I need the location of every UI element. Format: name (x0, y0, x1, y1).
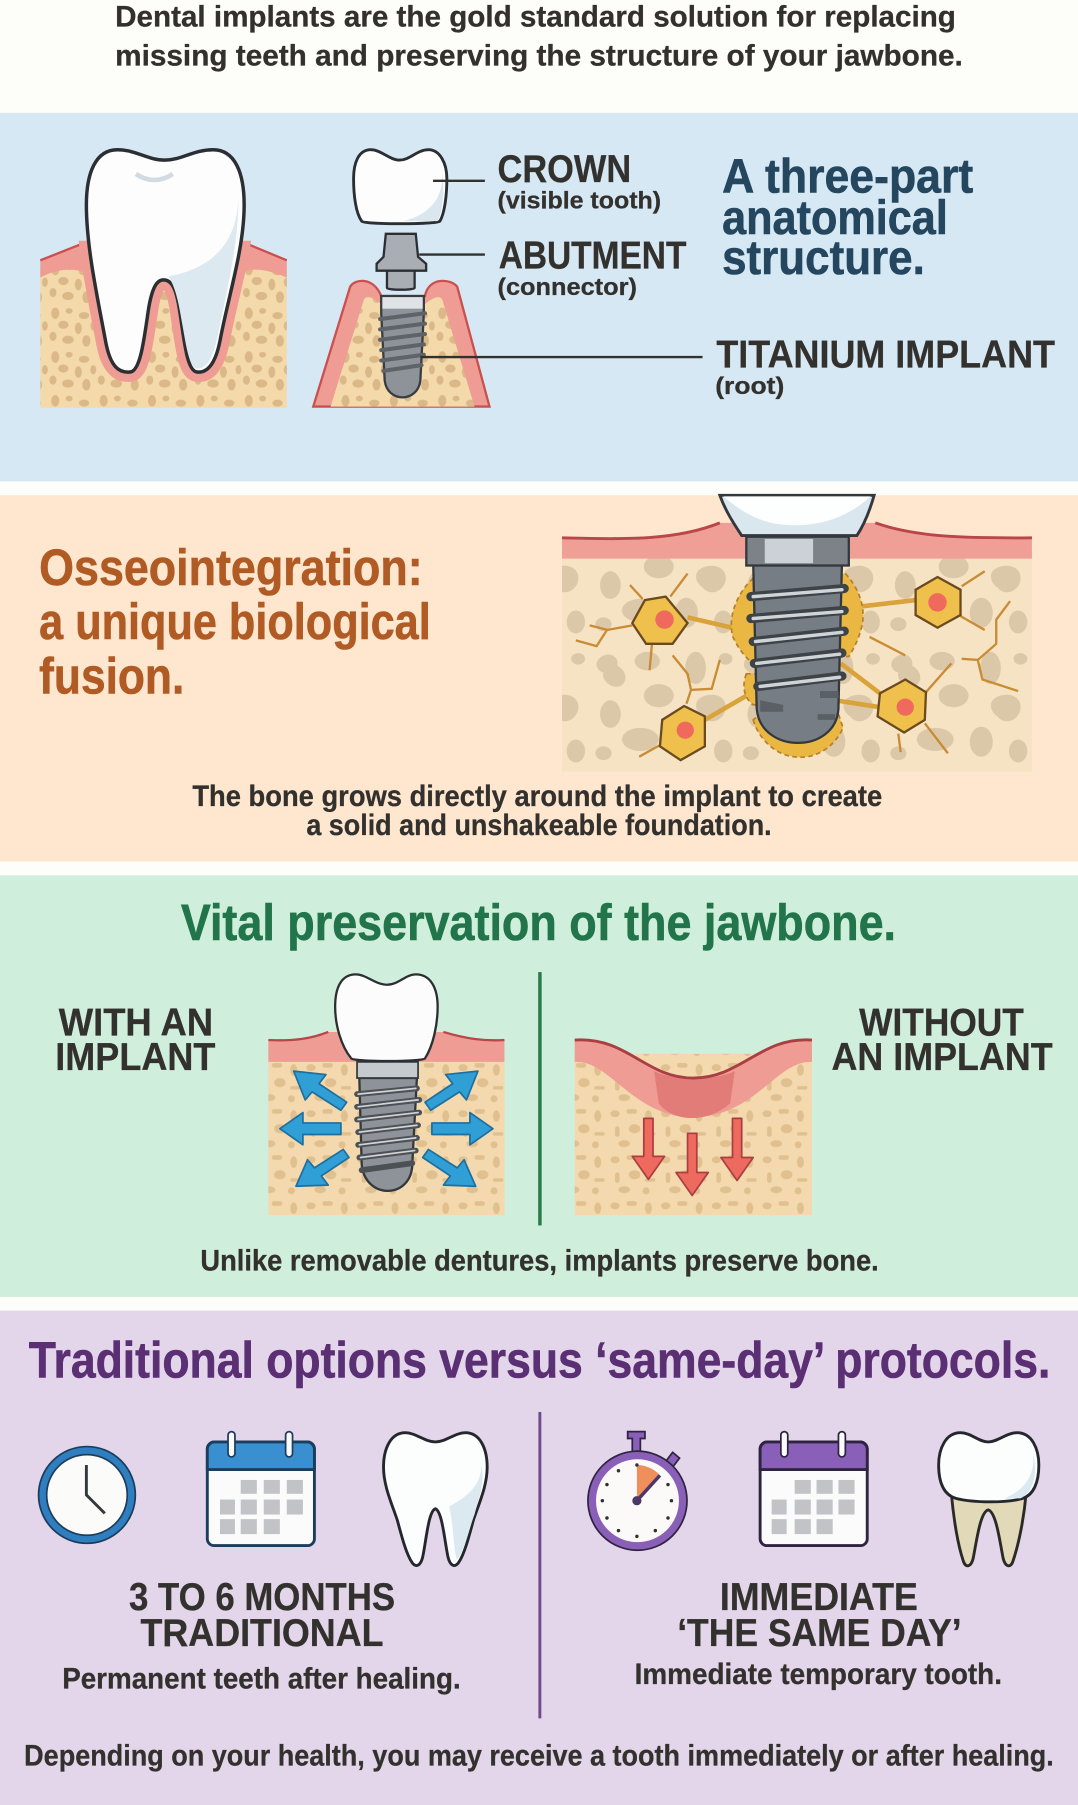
heading: vital preservation: Vital preservation of the jawbone. (181, 894, 896, 951)
abutment (377, 234, 426, 290)
text: traditional timeline (62, 1576, 461, 1695)
illustration: bone fusion around implant (562, 495, 1032, 772)
heading: osseointegration: fusion. (39, 647, 184, 704)
titanium implant (380, 296, 425, 397)
text: bone grows around implant: The bone grows directly around the implant to create (192, 780, 882, 813)
label: crown: (visible tooth) (498, 187, 661, 214)
illustration: bone with implant (268, 974, 504, 1215)
heading: three-part structure: structure. (722, 231, 925, 285)
label: without an implant: WITHOUT (859, 1001, 1024, 1044)
heading: osseointegration: Osseointegration: (39, 539, 423, 596)
label: without an implant: AN IMPLANT (832, 1036, 1053, 1079)
bone cells (632, 577, 961, 760)
label: titanium implant (715, 333, 1055, 400)
leader lines (419, 181, 703, 357)
implant threads (751, 589, 844, 686)
illustration: natural tooth in gum (40, 150, 287, 408)
text: traditional timeline: TRADITIONAL (141, 1612, 384, 1655)
heading: osseointegration (39, 539, 431, 704)
crown (354, 150, 447, 224)
text: bone grows around implant: a solid and unshakeable foundation. (306, 809, 772, 842)
panel: treatment protocols (0, 1311, 1078, 1805)
label: abutment: (connector) (498, 274, 637, 301)
icon: calendar blue (207, 1432, 314, 1546)
panel: anatomy (0, 113, 1078, 481)
intro heading: Dental implants are the gold standard solution for replacing (115, 1, 956, 34)
icon: natural tooth (384, 1433, 487, 1566)
label: crown: CROWN (498, 148, 631, 191)
bone cell branches (576, 571, 1018, 757)
intro heading (115, 1, 963, 73)
text: immediate timeline: IMMEDIATE (720, 1576, 918, 1619)
label: abutment: ABUTMENT (499, 234, 686, 277)
illustration: bone without implant (575, 1040, 812, 1215)
icon: temporary crown tooth (939, 1433, 1039, 1566)
heading: three-part structure: A three-part (722, 149, 973, 203)
crown (335, 974, 438, 1061)
panel: jawbone preservation (0, 875, 1078, 1297)
label: crown (498, 148, 661, 214)
red loss arrows (632, 1118, 753, 1195)
panel: osseointegration (0, 495, 1078, 861)
heading: three-part structure (722, 149, 973, 285)
blue growth arrows (280, 1071, 493, 1186)
cell connectors (688, 600, 916, 720)
heading: three-part structure: anatomical (722, 191, 948, 245)
heading: osseointegration: a unique biological (39, 593, 431, 650)
divider (538, 972, 542, 1225)
text: immediate timeline: Immediate temporary tooth. (635, 1658, 1002, 1691)
implant body (359, 1078, 417, 1191)
illustration: implant diagram (313, 150, 703, 407)
text: dentures comparison: Unlike removable dentures, implants preserve bone. (200, 1244, 879, 1277)
text: immediate timeline (635, 1576, 1002, 1691)
label: titanium implant: TITANIUM IMPLANT (716, 333, 1055, 376)
icon: clock (39, 1447, 135, 1543)
label: titanium implant: (root) (715, 373, 784, 400)
icon: stopwatch (588, 1432, 687, 1550)
label: abutment (498, 234, 686, 301)
intro heading: missing teeth and preserving the structure of your jawbone. (115, 40, 963, 73)
fused bone layer (731, 574, 863, 757)
divider (538, 1412, 541, 1718)
crown base (720, 495, 874, 536)
text: immediate timeline: ‘THE SAME DAY’ (677, 1612, 962, 1655)
label: without an implant (832, 1001, 1053, 1079)
text: bone grows around implant (192, 780, 882, 842)
text: traditional timeline: 3 TO 6 MONTHS (129, 1576, 395, 1619)
label: with an implant: IMPLANT (55, 1036, 215, 1079)
text: traditional timeline: Permanent teeth after healing. (62, 1662, 461, 1695)
icon: calendar purple (760, 1432, 867, 1546)
label: with an implant: WITH AN (59, 1001, 213, 1044)
implant body (753, 564, 842, 743)
label: with an implant (55, 1001, 215, 1079)
